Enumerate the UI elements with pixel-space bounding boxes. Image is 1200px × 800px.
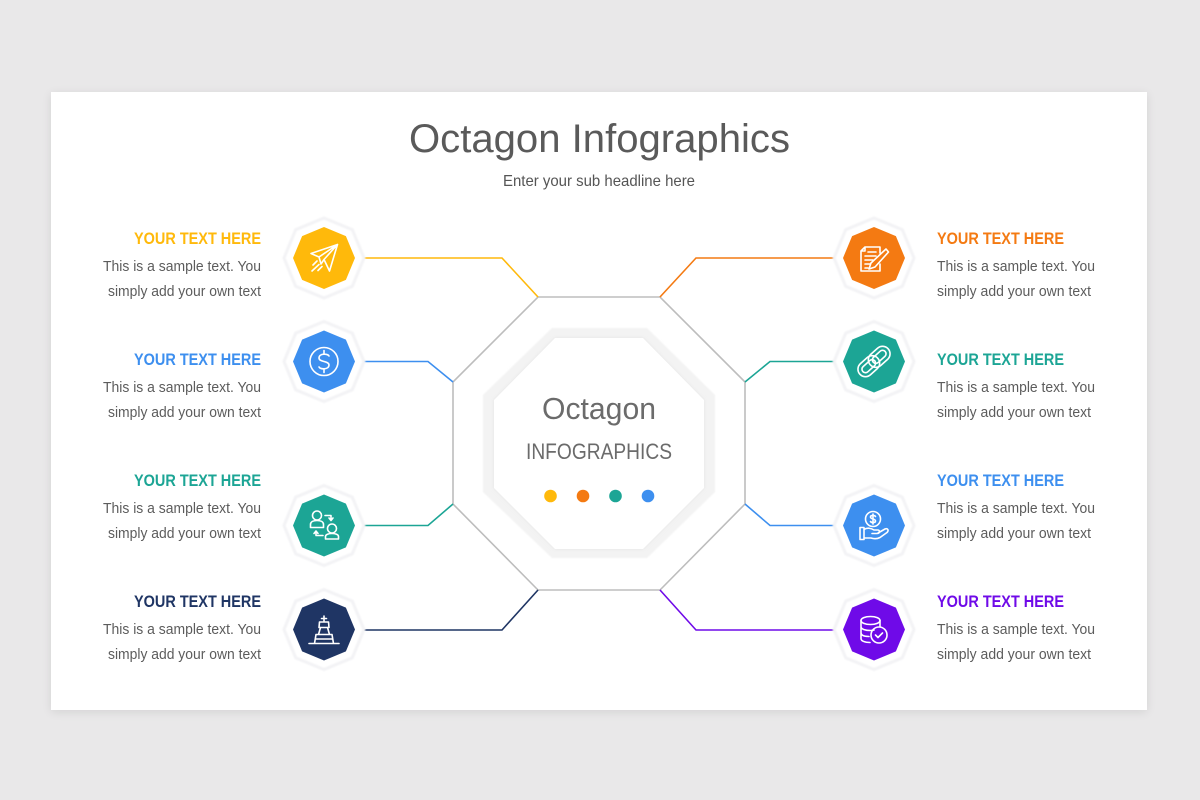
- text block: This is a sample text. You: [103, 501, 261, 517]
- icon: paper plane: [284, 218, 364, 298]
- icon: dollar circle: [284, 322, 364, 402]
- icon: document with pen: [834, 218, 914, 298]
- title: Octagon Infographics: [409, 117, 790, 161]
- text block: This is a sample text. You: [103, 259, 261, 275]
- item: right 3 hand coin: [834, 472, 1095, 566]
- text block: simply add your own text: [108, 647, 261, 663]
- text block: YOUR TEXT HERE: [937, 593, 1064, 611]
- icon: chess piece: [284, 590, 364, 670]
- text block: [103, 351, 261, 421]
- text block: [103, 230, 261, 300]
- item: right 4 database: [834, 590, 1095, 670]
- item: right 2 link: [794, 282, 1095, 441]
- text block: YOUR TEXT HERE: [937, 472, 1064, 490]
- text block: [937, 472, 1095, 542]
- subtitle: Enter your sub headline here: [503, 173, 695, 190]
- text block: simply add your own text: [108, 284, 261, 300]
- text block: YOUR TEXT HERE: [134, 230, 261, 248]
- text block: simply add your own text: [937, 284, 1091, 300]
- text block: YOUR TEXT HERE: [134, 351, 261, 369]
- icon: people exchange: [284, 486, 364, 566]
- text block: YOUR TEXT HERE: [937, 230, 1064, 248]
- item: right 1 document: [834, 218, 1095, 300]
- text block: This is a sample text. You: [103, 622, 261, 638]
- text block: [103, 472, 261, 542]
- text block: This is a sample text. You: [937, 259, 1095, 275]
- text block: simply add your own text: [937, 526, 1091, 542]
- large octagon outline: [453, 297, 745, 590]
- text block: simply add your own text: [937, 405, 1091, 421]
- text block: simply add your own text: [937, 647, 1091, 663]
- item: left 2 dollar: [103, 322, 364, 421]
- text block: This is a sample text. You: [937, 380, 1095, 396]
- icon: database check: [834, 590, 914, 670]
- text block: YOUR TEXT HERE: [937, 351, 1064, 369]
- icon: hand holding coin: [834, 486, 914, 566]
- text block: YOUR TEXT HERE: [134, 472, 261, 490]
- center heading: Octagon: [542, 391, 656, 426]
- slide panel: [51, 92, 1147, 710]
- icon: chain link: [794, 282, 954, 441]
- text block: YOUR TEXT HERE: [134, 593, 261, 611]
- text block: This is a sample text. You: [937, 501, 1095, 517]
- text block: [103, 593, 261, 663]
- item: left 4 chess king: [103, 590, 364, 670]
- connector lines: [364, 258, 835, 630]
- center dots: [544, 490, 654, 502]
- text block: [937, 593, 1095, 663]
- center octagon: [483, 328, 715, 558]
- item: left 1 paper plane: [103, 218, 364, 300]
- text block: This is a sample text. You: [937, 622, 1095, 638]
- text block: simply add your own text: [108, 405, 261, 421]
- text block: simply add your own text: [108, 526, 261, 542]
- panel shadow: [51, 94, 1147, 712]
- item: left 3 people exchange: [103, 472, 364, 566]
- text block: [937, 230, 1095, 300]
- center subheading: INFOGRAPHICS: [526, 439, 672, 464]
- text block: This is a sample text. You: [103, 380, 261, 396]
- text block: [937, 351, 1095, 421]
